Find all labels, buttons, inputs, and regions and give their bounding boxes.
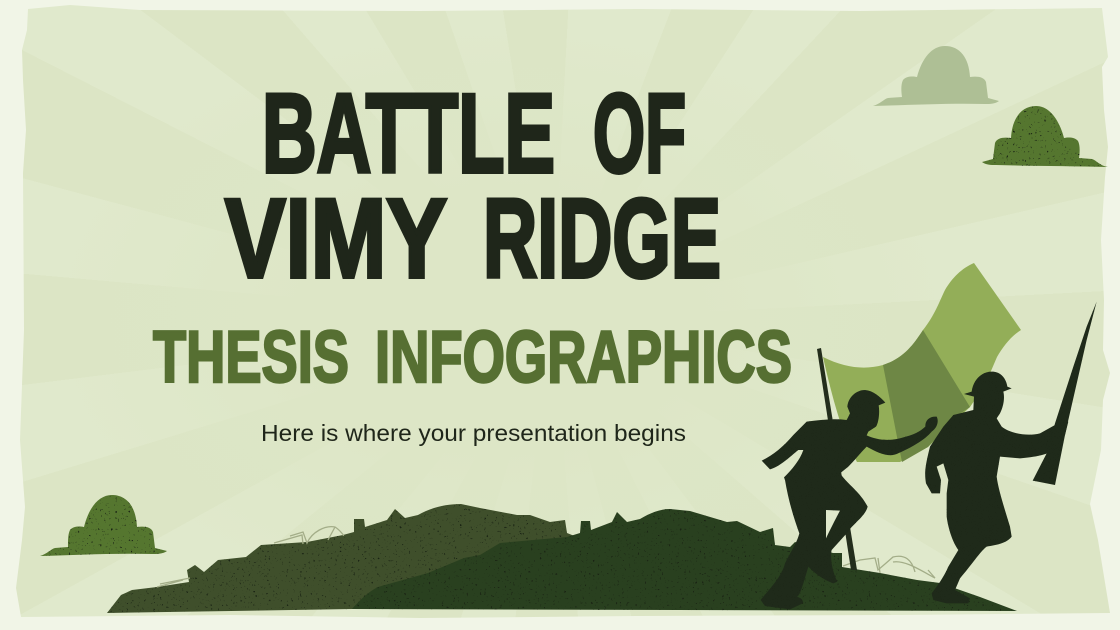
cloud: lower left dark [40,495,167,556]
flag [823,263,1021,462]
rifle [1033,302,1097,485]
cloud: top right dark [982,106,1108,167]
flag light panels [823,263,1021,462]
soldier: right, with rifle [925,372,1068,603]
soldier: left, running [761,390,938,609]
flag dark panel [883,330,970,462]
cloud: top pale [873,46,999,106]
barbed wire [157,527,935,587]
subtitle: Thesis Infographics: THESIS [153,317,349,398]
title: Battle of Vimy Ridge: OF [593,71,686,196]
tagline: Here is where your presentation begins [261,420,686,446]
title: Battle of Vimy Ridge: BATTLE [262,71,555,196]
flag pole [817,348,857,570]
title: Battle of Vimy Ridge: RIDGE [483,176,721,301]
title: Battle of Vimy Ridge [225,71,721,301]
hill: back [107,504,600,613]
subtitle: Thesis Infographics: INFOGRAPHICS [375,317,792,398]
hill: front [352,509,1017,611]
subtitle: Thesis Infographics [153,317,792,398]
title: Battle of Vimy Ridge: VIMY [225,176,447,301]
